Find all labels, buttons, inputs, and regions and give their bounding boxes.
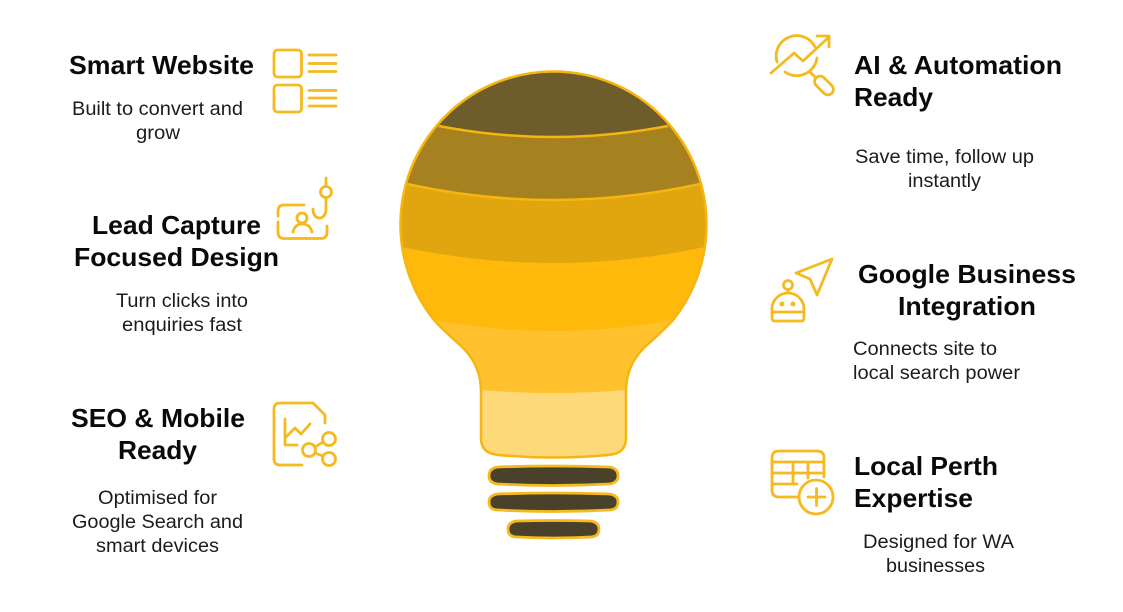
heading: Focused Design — [74, 242, 279, 272]
screw thread 2 — [489, 493, 618, 512]
heading: Ready — [854, 82, 934, 112]
description — [855, 147, 1034, 192]
heading: Smart Website — [69, 50, 254, 80]
description: grow — [136, 123, 180, 144]
description: instantly — [908, 171, 982, 192]
panel: seo and mobile — [71, 403, 336, 557]
description: businesses — [886, 556, 985, 577]
icon: hook and person — [278, 178, 332, 238]
icon: checklist — [274, 50, 336, 112]
screw thread 3 — [508, 520, 599, 538]
panel: local perth expertise — [772, 451, 1014, 577]
heading: SEO & Mobile — [71, 403, 245, 433]
description: enquiries fast — [122, 315, 243, 336]
icon: robot and navigation arrow — [772, 259, 832, 321]
heading — [71, 403, 245, 465]
description: local search power — [853, 363, 1021, 384]
description — [72, 488, 243, 557]
description: Turn clicks into — [116, 291, 248, 312]
heading: AI & Automation — [854, 50, 1062, 80]
bulb glass with colour bands — [402, 72, 706, 456]
heading: Integration — [898, 291, 1036, 321]
description: Connects site to — [853, 339, 997, 360]
description: smart devices — [96, 536, 219, 557]
description: Built to convert and — [72, 99, 243, 120]
lightbulb illustration — [390, 60, 720, 538]
bulb outline — [401, 71, 706, 457]
description: Google Search and — [72, 512, 243, 533]
panel: lead capture — [74, 178, 332, 336]
description — [863, 532, 1014, 577]
panel: google business integration — [772, 259, 1076, 384]
heading: Lead Capture — [92, 210, 261, 240]
heading — [854, 50, 1062, 112]
description: Optimised for — [98, 488, 218, 509]
heading — [854, 451, 998, 513]
heading: Expertise — [854, 483, 973, 513]
heading: Local Perth — [854, 451, 998, 481]
panel: smart website — [69, 50, 336, 144]
description — [116, 291, 248, 336]
screw thread 1 — [489, 466, 618, 486]
icon: table with plus — [772, 451, 833, 514]
heading: Google Business — [858, 259, 1076, 289]
icon: magnifier and growth arrow — [771, 36, 836, 97]
panel: ai and automation — [771, 36, 1062, 192]
description: Designed for WA — [863, 532, 1014, 553]
description: Save time, follow up — [855, 147, 1034, 168]
description — [72, 99, 243, 144]
icon: document chart and share — [274, 403, 336, 466]
description — [853, 339, 1021, 384]
heading — [858, 259, 1076, 321]
heading: Ready — [118, 435, 198, 465]
heading — [74, 210, 279, 272]
